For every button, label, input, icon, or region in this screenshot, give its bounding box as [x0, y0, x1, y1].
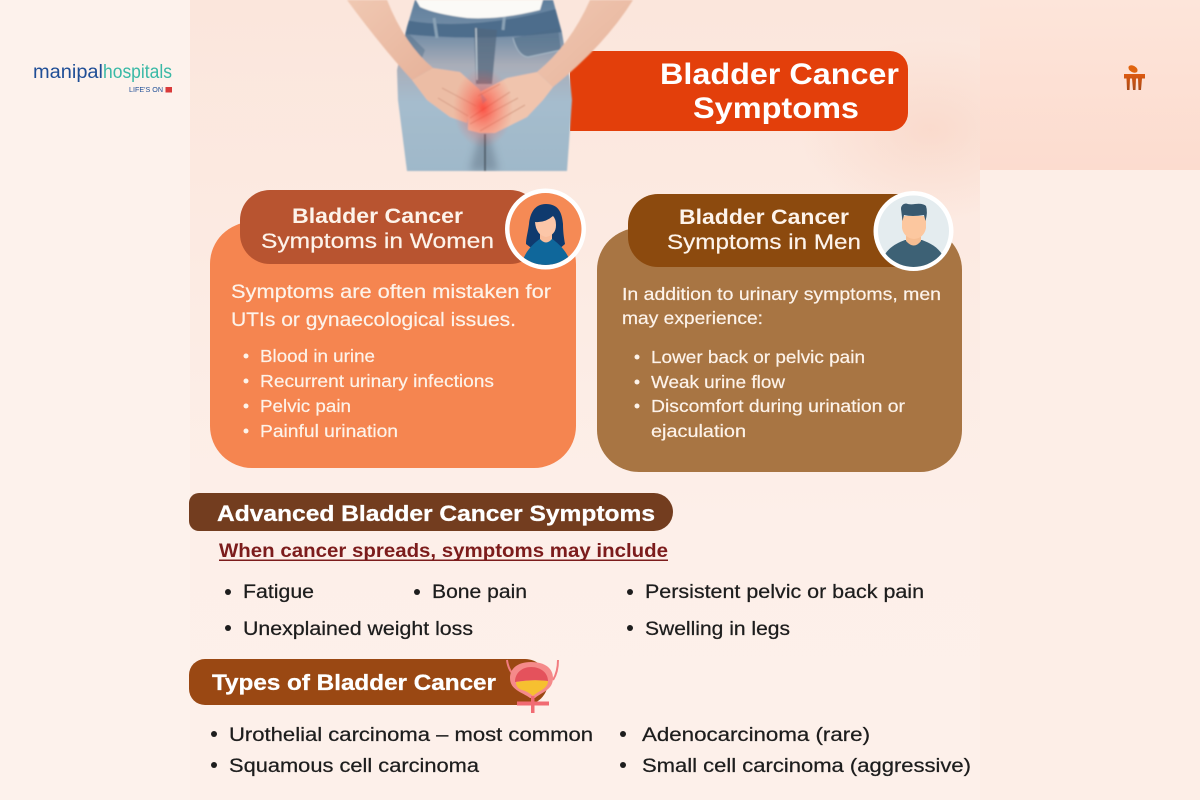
types of bladder cancer list: Squamous cell carcinoma	[229, 755, 479, 777]
subheading: when cancer spreads: When cancer spreads, symptoms may include	[219, 540, 668, 562]
types of bladder cancer list: Adenocarcinoma (rare)	[642, 724, 870, 746]
men symptom list: Discomfort during urination or	[651, 396, 905, 416]
women intro text: Symptoms are often mistaken for	[231, 281, 552, 303]
title text: Bladder Cancer	[660, 58, 899, 91]
icon: bladder	[507, 660, 558, 713]
advanced symptom list: Fatigue	[243, 581, 314, 603]
panel: women	[210, 188, 586, 468]
icon: man avatar	[874, 191, 954, 275]
women header: Bladder Cancer	[292, 205, 463, 228]
women symptom list	[244, 346, 494, 441]
icon: woman avatar	[505, 188, 586, 270]
advanced symptom list	[225, 581, 924, 640]
title banner: Symptoms	[693, 92, 859, 125]
logo: manipalhospitals: hospitals	[103, 62, 172, 83]
men symptom list: Weak urine flow	[651, 372, 785, 392]
men header: Bladder Cancer	[679, 206, 849, 229]
men symptom list: ejaculation	[651, 421, 746, 441]
men symptom list	[634, 347, 905, 441]
women header	[240, 190, 540, 264]
photo: woman holding pelvis in jeans	[347, 0, 633, 171]
women header: Symptoms in Women	[261, 230, 494, 253]
men intro text: may experience:	[622, 308, 763, 328]
logo: manipalhospitals: manipal	[33, 62, 103, 83]
advanced symptom list: Swelling in legs	[645, 618, 790, 640]
women symptom list: Blood in urine	[260, 346, 375, 366]
types of bladder cancer list	[211, 724, 971, 777]
section: types heading: Types of Bladder Cancer	[212, 670, 496, 695]
women intro text	[231, 281, 552, 331]
women intro text: UTIs or gynaecological issues.	[231, 309, 516, 331]
men intro text	[622, 284, 941, 328]
logo: manipalhospitals	[33, 62, 172, 94]
title banner	[570, 51, 908, 131]
panel: men	[597, 191, 962, 472]
section: advanced symptoms heading	[189, 493, 673, 531]
advanced symptom list: Bone pain	[432, 581, 527, 603]
women symptom list: Painful urination	[260, 421, 398, 441]
women symptom list: Pelvic pain	[260, 396, 351, 416]
men symptom list: Lower back or pelvic pain	[651, 347, 865, 367]
advanced symptom list: Unexplained weight loss	[243, 618, 473, 640]
men header	[628, 194, 900, 267]
section: types heading	[189, 659, 548, 705]
logo: manipalhospitals: LIFE'S ON	[129, 87, 163, 94]
men header: Symptoms in Men	[667, 231, 861, 254]
section: advanced symptoms heading: Advanced Bladder Cancer Symptoms	[217, 501, 655, 526]
background	[190, 0, 1200, 240]
men intro text: In addition to urinary symptoms, men	[622, 284, 941, 304]
types of bladder cancer list: Small cell carcinoma (aggressive)	[642, 755, 971, 777]
types of bladder cancer list: Urothelial carcinoma – most common	[229, 724, 593, 746]
advanced symptom list: Persistent pelvic or back pain	[645, 581, 924, 603]
women symptom list: Recurrent urinary infections	[260, 371, 494, 391]
icon: brand emblem	[1124, 64, 1145, 90]
